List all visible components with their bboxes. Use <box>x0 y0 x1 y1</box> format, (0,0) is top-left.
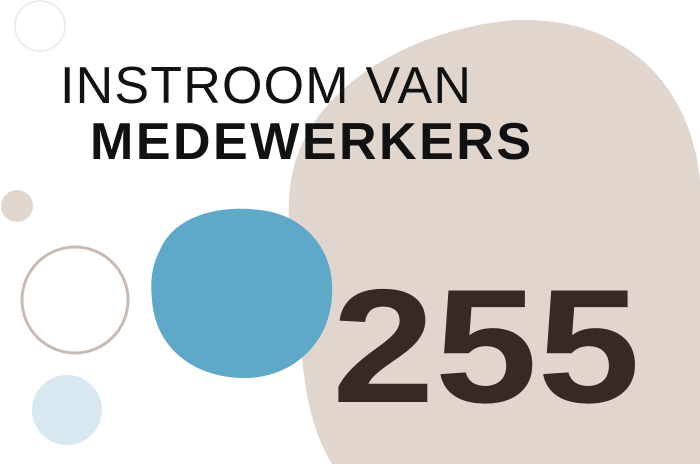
icon: big beige blob <box>289 20 700 464</box>
title line 2: MEDEWERKERS <box>90 113 534 171</box>
icon: outline circle top <box>15 1 65 51</box>
title line 1: INSTROOM VAN <box>60 57 472 115</box>
icon: blue blob <box>151 209 332 378</box>
icon: outline circle middle <box>22 247 128 353</box>
icon: small beige dot <box>1 190 33 222</box>
number: 255 <box>332 256 640 437</box>
title <box>60 57 534 171</box>
icon: light blue circle <box>32 375 102 445</box>
